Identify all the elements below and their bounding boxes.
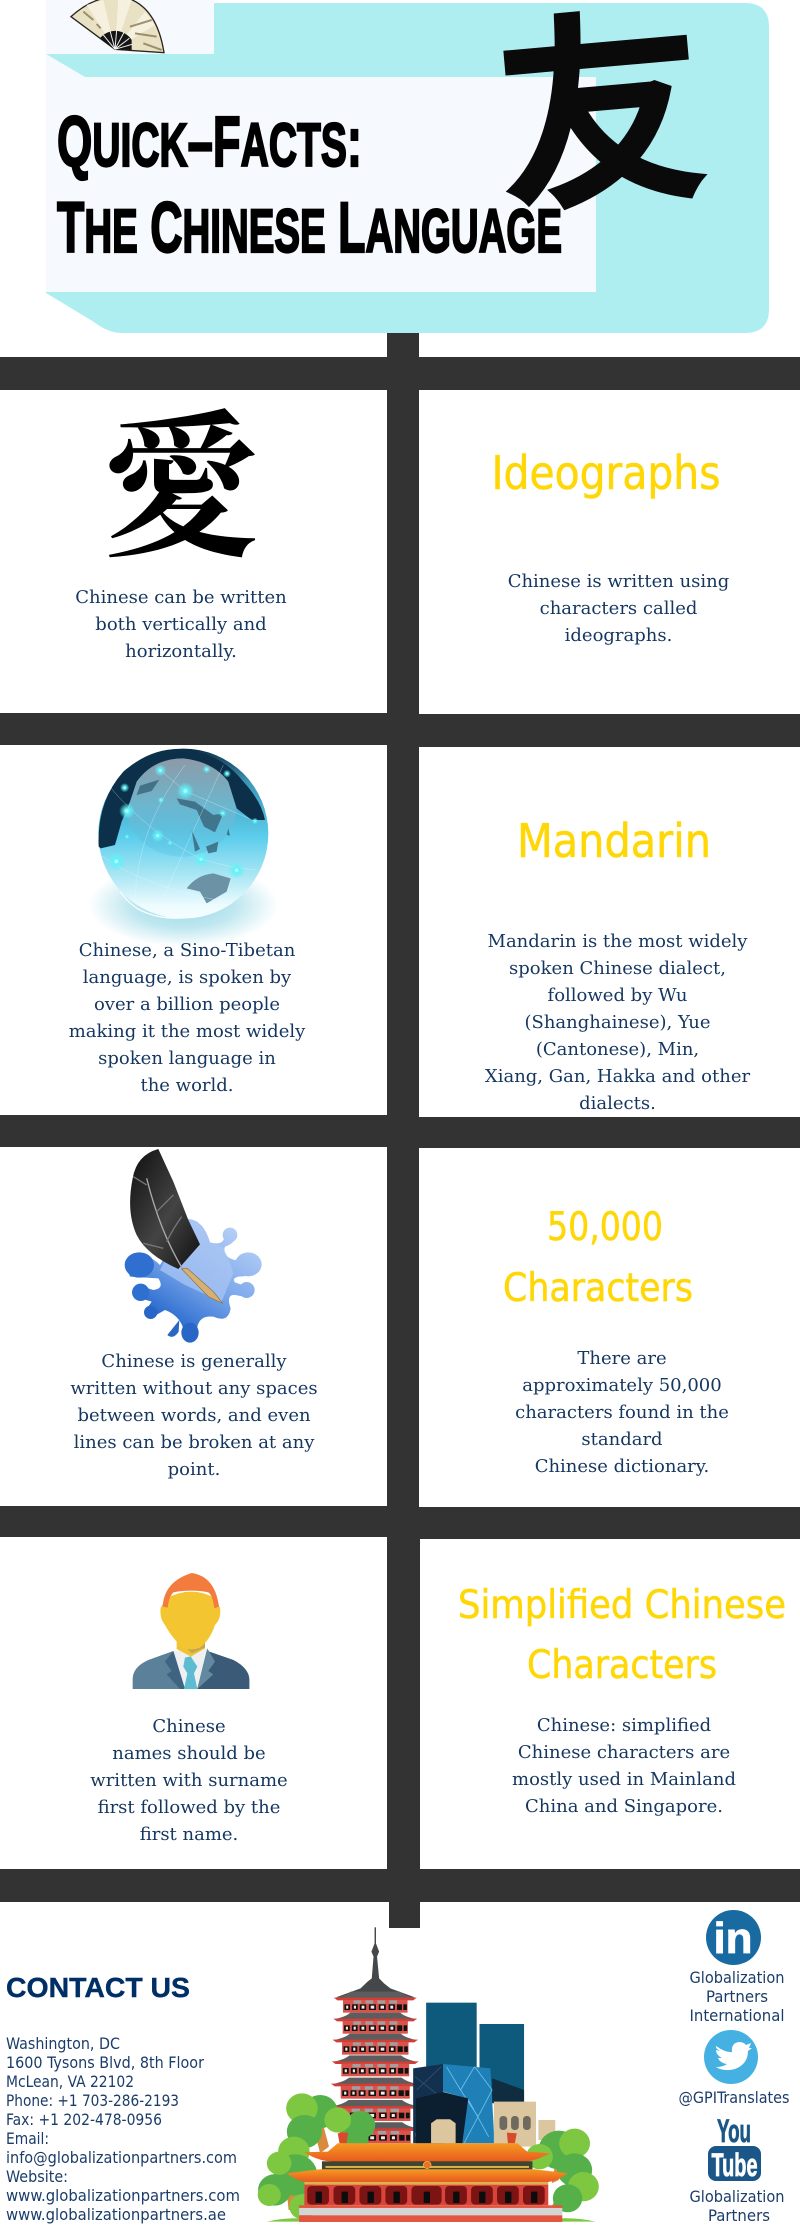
text block: mandarin: Xiang, Gan, Hakka and other bbox=[485, 1066, 750, 1087]
text block: 50,000 characters: approximately 50,000 bbox=[522, 1375, 722, 1396]
text block: spacing: lines can be broken at any bbox=[74, 1432, 315, 1453]
icon: quill and ink splat bbox=[125, 1149, 262, 1343]
title: THE CHINESE LANGUAGE bbox=[57, 189, 562, 268]
heading: 50,000 characters: Characters bbox=[503, 1266, 693, 1311]
text block: mandarin bbox=[485, 931, 750, 1114]
title bbox=[57, 103, 562, 268]
great wall bbox=[494, 2102, 555, 2147]
panel: writing direction bbox=[75, 362, 287, 662]
text block: speakers: making it the most widely bbox=[69, 1021, 306, 1042]
text: twitter handle: @GPITranslates bbox=[678, 2088, 790, 2107]
panel: contact bbox=[6, 1972, 240, 2224]
icon: youtube: You bbox=[717, 2113, 751, 2149]
text block: address: McLean, VA 22102 bbox=[6, 2072, 134, 2091]
text block: writing direction bbox=[75, 587, 287, 662]
text block: address: Website: bbox=[6, 2167, 68, 2186]
panel: speakers bbox=[69, 749, 306, 1096]
panel: fan box bbox=[46, 0, 214, 54]
text block: address bbox=[6, 2034, 240, 2224]
text block: writing direction: Chinese can be written bbox=[75, 587, 287, 608]
text block: mandarin: spoken Chinese dialect, bbox=[509, 958, 726, 979]
trees bbox=[258, 2093, 599, 2222]
text block: address: www.globalizationpartners.com bbox=[6, 2186, 240, 2205]
text block: spacing: point. bbox=[168, 1459, 220, 1480]
panel: simplified characters bbox=[458, 1583, 786, 1817]
heading: simplified chinese characters bbox=[458, 1583, 786, 1688]
text: youtube name: Partners bbox=[708, 2206, 770, 2225]
text block: 50,000 characters: There are bbox=[577, 1348, 667, 1369]
icon: youtube bbox=[708, 2113, 761, 2183]
palace bbox=[287, 2133, 568, 2222]
text block: mandarin: (Shanghainese), Yue bbox=[524, 1012, 711, 1033]
text block: ideographs: Chinese is written using bbox=[508, 571, 729, 592]
text block: 50,000 characters: standard bbox=[581, 1429, 663, 1450]
text block: simplified characters: mostly used in Mainland bbox=[512, 1769, 736, 1790]
text block: address: Phone: +1 703-286-2193 bbox=[6, 2091, 179, 2110]
text block: speakers: over a billion people bbox=[94, 994, 280, 1015]
text block: speakers bbox=[69, 940, 306, 1096]
heading: simplified chinese characters: Simplified Chinese bbox=[458, 1583, 786, 1628]
panel: spacing bbox=[70, 1149, 318, 1480]
icon: youtube: Tube bbox=[712, 2147, 758, 2183]
pagoda bbox=[330, 1927, 421, 2143]
heading: ideographs: Ideographs bbox=[492, 446, 720, 500]
icon: linkedin bbox=[706, 1910, 761, 1965]
text block: ideographs bbox=[508, 571, 729, 646]
icon: linkedin: in bbox=[713, 1914, 753, 1963]
text block: names: names should be bbox=[112, 1743, 266, 1764]
heading: 50,000 characters: 50,000 bbox=[547, 1205, 663, 1250]
text block: ideographs: characters called bbox=[540, 598, 697, 619]
text block: speakers: Chinese, a Sino-Tibetan bbox=[79, 940, 296, 961]
icon: twitter bbox=[704, 2030, 758, 2084]
text block: 50,000 characters: characters found in the bbox=[515, 1402, 729, 1423]
text block: spacing: written without any spaces bbox=[70, 1378, 318, 1399]
text block: mandarin: followed by Wu bbox=[548, 985, 687, 1006]
header banner bbox=[46, 0, 769, 333]
panel: mandarin bbox=[485, 814, 750, 1114]
text block: mandarin: Mandarin is the most widely bbox=[488, 931, 748, 952]
panel: title box bbox=[46, 77, 596, 292]
text block: spacing bbox=[70, 1351, 318, 1480]
text block: writing direction: horizontally. bbox=[125, 641, 237, 662]
text block: simplified characters: China and Singapore. bbox=[525, 1796, 723, 1817]
text: linkedin name bbox=[690, 1968, 784, 2025]
text block: spacing: between words, and even bbox=[77, 1405, 311, 1426]
text block: address: info@globalizationpartners.com bbox=[6, 2148, 237, 2167]
text block: names bbox=[90, 1716, 288, 1845]
text block: address: Fax: +1 202-478-0956 bbox=[6, 2110, 162, 2129]
text block: ideographs: ideographs. bbox=[565, 625, 672, 646]
panel: social links bbox=[678, 1910, 790, 2225]
text block: simplified characters: Chinese: simplified bbox=[537, 1715, 711, 1736]
icon: love character: 愛 bbox=[102, 362, 260, 589]
panel: ideographs bbox=[492, 446, 729, 646]
text block: names: written with surname bbox=[90, 1770, 288, 1791]
text block: speakers: the world. bbox=[140, 1075, 234, 1096]
text: linkedin name: Partners bbox=[706, 1987, 768, 2006]
skyscrapers bbox=[413, 2003, 524, 2143]
text block: simplified characters: Chinese characters are bbox=[518, 1742, 730, 1763]
text block: mandarin: (Cantonese), Min, bbox=[536, 1039, 699, 1060]
text block: speakers: language, is spoken by bbox=[83, 967, 292, 988]
text block: mandarin: dialects. bbox=[579, 1093, 656, 1114]
text block: address: Washington, DC bbox=[6, 2034, 120, 2053]
heading: 50,000 characters bbox=[503, 1205, 693, 1311]
text block: writing direction: both vertically and bbox=[95, 614, 267, 635]
heading: mandarin: Mandarin bbox=[517, 814, 711, 868]
text block: 50,000 characters bbox=[515, 1348, 729, 1477]
text block: address: Email: bbox=[6, 2129, 49, 2148]
text block: speakers: spoken language in bbox=[98, 1048, 276, 1069]
text block: names: first followed by the bbox=[98, 1797, 280, 1818]
icon: businessman bbox=[133, 1573, 249, 1689]
text block: simplified characters bbox=[512, 1715, 736, 1817]
panel: names bbox=[90, 1573, 288, 1845]
icon: folding fan bbox=[71, 0, 164, 53]
text: linkedin name: Globalization bbox=[690, 1968, 784, 1987]
text block: spacing: Chinese is generally bbox=[101, 1351, 287, 1372]
panel: 50,000 characters bbox=[503, 1205, 729, 1477]
heading: simplified chinese characters: Characters bbox=[527, 1643, 717, 1688]
illustration: pagoda, skyline and palace bbox=[258, 1927, 599, 2222]
text block: names: Chinese bbox=[152, 1716, 226, 1737]
text block: address: 1600 Tysons Blvd, 8th Floor bbox=[6, 2053, 204, 2072]
timeline bars bbox=[0, 333, 800, 1928]
text block: 50,000 characters: Chinese dictionary. bbox=[535, 1456, 709, 1477]
heading: contact us: CONTACT US bbox=[6, 1972, 190, 2003]
text: linkedin name: International bbox=[690, 2006, 784, 2025]
icon: globe bbox=[88, 749, 278, 947]
text block: address: www.globalizationpartners.ae bbox=[6, 2205, 226, 2224]
text: youtube name bbox=[690, 2187, 784, 2225]
text: youtube name: Globalization bbox=[690, 2187, 784, 2206]
text block: names: first name. bbox=[140, 1824, 238, 1845]
title: QUICK–FACTS: bbox=[57, 103, 362, 182]
